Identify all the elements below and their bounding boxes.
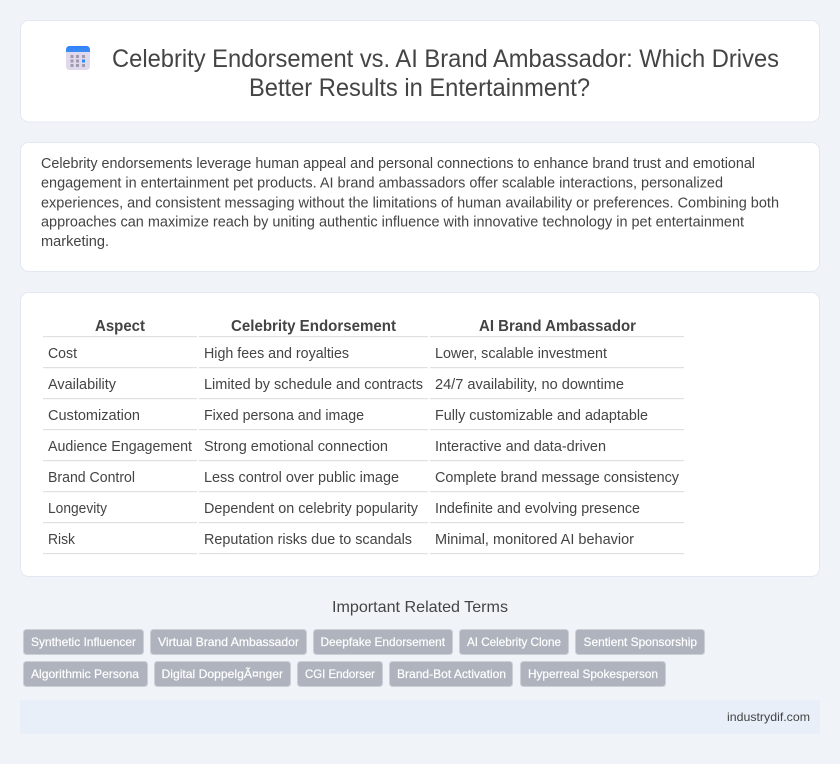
heading: Better Results in Entertainment? — [249, 74, 590, 102]
footer — [20, 700, 820, 734]
heading — [112, 45, 779, 102]
row: customization: Fully customizable and adaptable — [435, 408, 648, 424]
tag: Virtual Brand Ambassador — [158, 635, 299, 649]
row: longevity: Longevity — [48, 501, 108, 517]
row: cost: Cost — [48, 346, 77, 362]
panel: summary text: experiences, and consistent messaging without the limitations of human availability or preferences. Combining both — [41, 196, 779, 212]
heading: Celebrity Endorsement vs. AI Brand Ambassador: Which Drives — [112, 45, 779, 73]
tag — [576, 630, 704, 654]
panel: summary text: Celebrity endorsements leverage human appeal and personal connections to enhance brand trust and emotional — [41, 156, 755, 172]
row: audience engagement — [48, 439, 606, 455]
tag — [390, 662, 512, 686]
table header: Aspect — [95, 318, 146, 335]
row: customization — [48, 408, 648, 424]
tags: related terms — [24, 630, 704, 686]
panel: comparison table — [20, 292, 820, 576]
row: brand control — [48, 470, 680, 486]
table header: Celebrity Endorsement — [231, 318, 397, 335]
row: risk: Minimal, monitored AI behavior — [435, 532, 634, 548]
tag — [520, 662, 666, 686]
row: availability — [48, 377, 624, 393]
table rules — [43, 336, 684, 554]
tag — [314, 630, 452, 654]
icon: calendar — [66, 46, 90, 70]
tag — [24, 630, 144, 654]
row: brand control: Brand Control — [48, 470, 135, 486]
row: customization: Customization — [48, 408, 140, 424]
footer: industrydif.com — [727, 710, 810, 724]
tag: Sentient Sponsorship — [584, 635, 697, 649]
tag: Synthetic Influencer — [31, 635, 136, 649]
row: cost — [48, 346, 607, 362]
tag: Algorithmic Persona — [31, 667, 139, 681]
tag — [150, 630, 306, 654]
tag: CGI Endorser — [305, 667, 375, 681]
row: brand control: Less control over public image — [204, 470, 399, 486]
tag: AI Celebrity Clone — [467, 635, 561, 649]
row: availability: Availability — [48, 377, 117, 393]
heading: related terms: Important Related Terms — [332, 599, 508, 616]
row: audience engagement: Interactive and data-driven — [435, 439, 606, 455]
tag — [298, 662, 382, 686]
panel: summary text — [20, 142, 820, 272]
panel: summary text: approaches can maximize reach by uniting authentic influence with innovative technology in pet entertainment — [41, 214, 744, 230]
panel: summary text: engagement in entertainment pet products. AI brand ambassadors offer scalable interactions, personalized — [41, 176, 723, 192]
panel: summary text: marketing. — [41, 234, 109, 250]
row: longevity: Indefinite and evolving presence — [435, 501, 640, 517]
row: longevity: Dependent on celebrity popularity — [204, 501, 419, 517]
row: risk — [48, 532, 634, 548]
row: customization: Fixed persona and image — [204, 408, 364, 424]
row: risk: Risk — [48, 532, 76, 548]
tag — [460, 630, 568, 654]
tag: Brand-Bot Activation — [397, 667, 506, 681]
row: longevity — [48, 501, 640, 517]
row: brand control: Complete brand message consistency — [435, 470, 680, 486]
row: cost: Lower, scalable investment — [435, 346, 607, 362]
table header — [95, 318, 636, 335]
tag — [154, 662, 290, 686]
row: risk: Reputation risks due to scandals — [204, 532, 412, 548]
row: availability: Limited by schedule and contracts — [204, 377, 423, 393]
row: availability: 24/7 availability, no downtime — [435, 377, 624, 393]
row: cost: High fees and royalties — [204, 346, 349, 362]
tag: Digital DoppelgÃ¤nger — [162, 667, 283, 681]
panel: title — [20, 20, 820, 122]
table header: AI Brand Ambassador — [479, 318, 636, 335]
tag — [24, 662, 148, 686]
tag: Deepfake Endorsement — [320, 635, 446, 649]
row: audience engagement: Strong emotional connection — [204, 439, 388, 455]
tag: Hyperreal Spokesperson — [528, 667, 658, 681]
row: audience engagement: Audience Engagement — [48, 439, 192, 455]
